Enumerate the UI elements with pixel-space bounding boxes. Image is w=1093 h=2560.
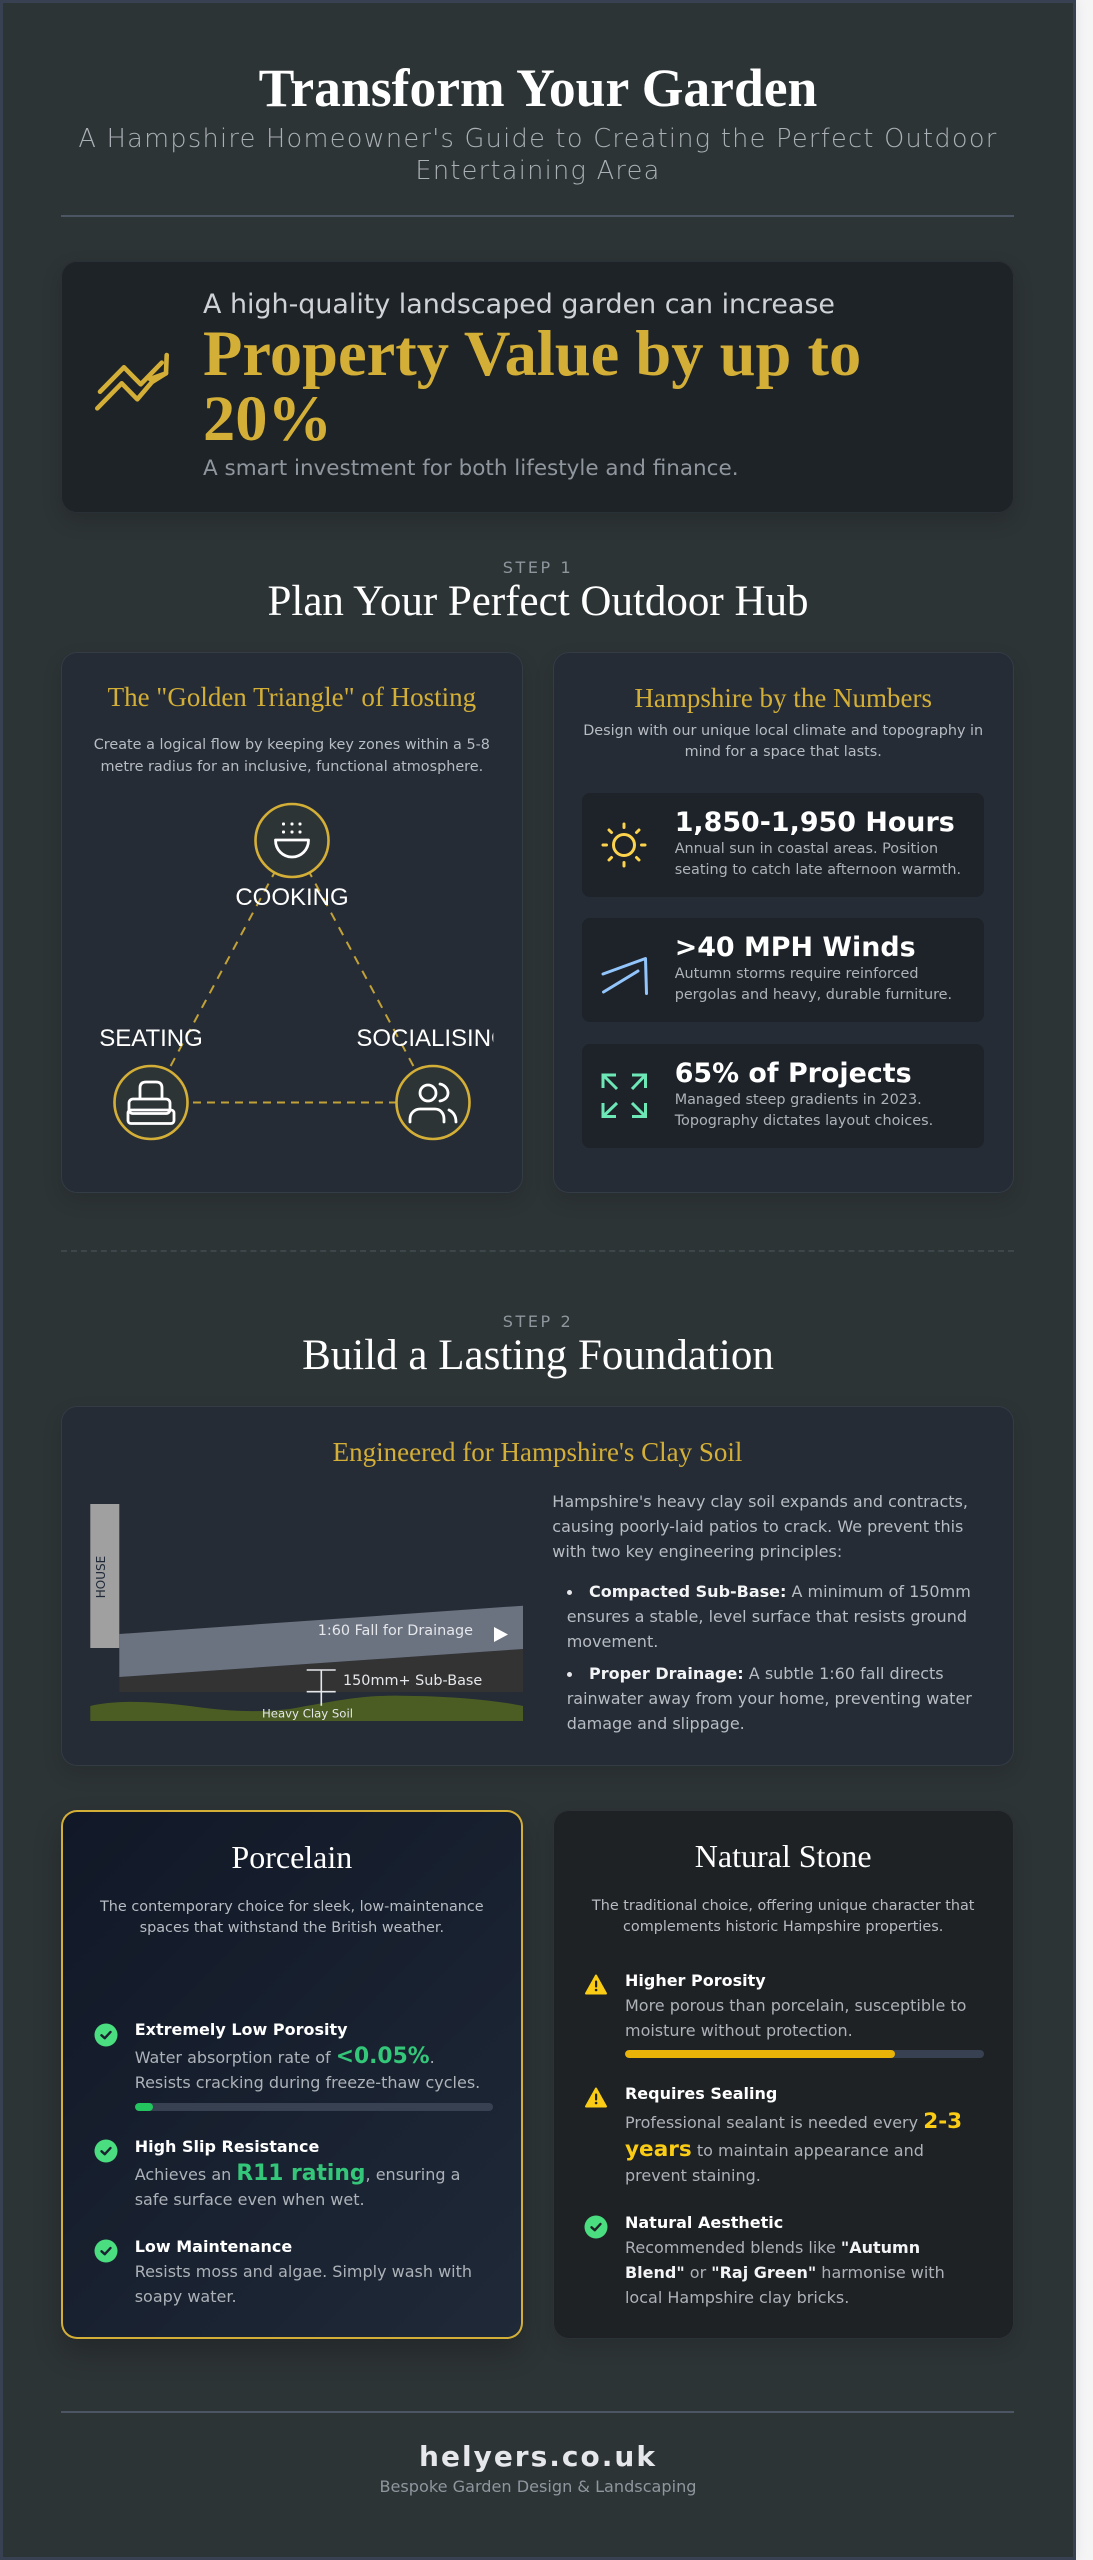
subtitle	[78, 124, 998, 186]
section title: Build a Lasting Foundation	[302, 1332, 774, 1378]
bullet: sub-base: ensures a stable, level surface that resists ground	[567, 1607, 967, 1626]
bullet: drainage	[567, 1664, 972, 1733]
description	[583, 723, 983, 760]
patio cross-section diagram	[90, 1504, 523, 1721]
feature text	[625, 2238, 945, 2307]
node: seating: SEATING	[99, 1025, 203, 1052]
stat text: Autumn storms require reinforced	[675, 966, 919, 982]
title: Transform Your Garden	[259, 58, 817, 118]
feature text	[135, 2262, 472, 2306]
bar: porosity	[625, 2050, 984, 2058]
description: The traditional choice, offering unique character that	[592, 1898, 974, 1914]
feature: low porosity	[94, 2020, 493, 2111]
icon: check	[94, 2240, 118, 2262]
heading: Engineered for Hampshire's Clay Soil	[333, 1437, 742, 1467]
heading: Hampshire by the Numbers	[634, 683, 932, 713]
bullet: sub-base: Compacted Sub-Base: A minimum of 150mm	[589, 1582, 971, 1601]
bullet: drainage: rainwater away from your home, preventing water	[567, 1689, 972, 1708]
icon: trending up	[95, 352, 169, 411]
heading: The "Golden Triangle" of Hosting	[108, 682, 476, 712]
stat text	[674, 966, 952, 1003]
description	[94, 737, 490, 775]
node: cooking: COOKING	[235, 884, 349, 911]
section title: Plan Your Perfect Outdoor Hub	[267, 578, 809, 625]
feature text: Blend" or "Raj Green" harmonise with	[625, 2263, 945, 2282]
house: HOUSE	[94, 1556, 108, 1598]
node: cooking	[235, 804, 349, 911]
bullet: sub-base	[567, 1582, 971, 1651]
feature title: High Slip Resistance	[135, 2137, 319, 2156]
description	[592, 1898, 974, 1935]
panel: golden triangle	[61, 652, 523, 1193]
feature title: Extremely Low Porosity	[135, 2020, 348, 2039]
stat: sun hours	[582, 793, 984, 897]
stat text: seating to catch late afternoon warmth.	[675, 862, 961, 878]
sub-base layer	[119, 1649, 523, 1692]
bar: absorption	[135, 2103, 493, 2111]
subtitle: A Hampshire Homeowner's Guide to Creating the Perfect Outdoor	[78, 124, 998, 154]
feature text: local Hampshire clay bricks.	[625, 2288, 849, 2307]
description: The contemporary choice for sleek, low-maintenance	[100, 1899, 484, 1915]
step label: STEP 2	[503, 1312, 573, 1331]
label: fall: 1:60 Fall for Drainage	[318, 1623, 473, 1639]
heading: Natural Stone	[695, 1838, 872, 1874]
feature text	[625, 1996, 966, 2040]
heading: Porcelain	[231, 1839, 352, 1875]
feature text: Resists moss and algae. Simply wash with	[135, 2262, 472, 2281]
bullet: drainage: Proper Drainage: A subtle 1:60 fall directs	[589, 1664, 944, 1683]
step 2 heading	[302, 1312, 774, 1378]
step 1 heading	[267, 558, 809, 625]
explanation paragraph: causing poorly-laid patios to crack. We prevent this	[552, 1517, 963, 1536]
icon: warning	[585, 1974, 607, 1994]
panel: property value hero	[61, 261, 1014, 513]
explanation paragraph: Hampshire's heavy clay soil expands and contracts,	[552, 1492, 968, 1511]
triangle diagram	[100, 802, 494, 1140]
feature text: Recommended blends like "Autumn	[625, 2238, 920, 2257]
feature title: Requires Sealing	[625, 2084, 777, 2103]
stat text	[674, 841, 961, 878]
step label: STEP 1	[503, 558, 573, 576]
label: soil: Heavy Clay Soil	[262, 1707, 353, 1721]
feature text: prevent staining.	[625, 2166, 761, 2185]
hero headline: 20%	[203, 383, 332, 454]
icon: check	[94, 2140, 118, 2162]
bullet: sub-base: movement.	[567, 1632, 658, 1651]
label: sub-base: 150mm+ Sub-Base	[343, 1673, 482, 1689]
stat text: Annual sun in coastal areas. Position	[675, 841, 938, 857]
hero intro: A high-quality landscaped garden can increase	[203, 289, 835, 320]
arrow: drainage direction	[494, 1627, 508, 1642]
stat: winds	[582, 918, 984, 1022]
hero headline	[203, 318, 861, 454]
feature title: Low Maintenance	[135, 2237, 292, 2256]
header	[78, 58, 998, 186]
description: Design with our unique local climate and topography in	[583, 723, 983, 739]
measure: sub-base depth	[307, 1670, 336, 1706]
explanation paragraph: with two key engineering principles:	[552, 1542, 842, 1561]
panel: porcelain	[61, 1810, 523, 2339]
stat: projects	[582, 1044, 984, 1148]
feature text: moisture without protection.	[625, 2021, 853, 2040]
feature title: Higher Porosity	[625, 1971, 766, 1990]
node: seating	[99, 1025, 203, 1139]
house	[90, 1504, 119, 1648]
feature text: safe surface even when wet.	[135, 2190, 365, 2209]
stat value: 1,850-1,950 Hours	[675, 807, 955, 838]
icon: sun	[602, 822, 646, 868]
footer	[379, 2440, 697, 2496]
stat text: pergolas and heavy, durable furniture.	[675, 987, 952, 1003]
subtitle: Entertaining Area	[415, 156, 661, 186]
stat text: Topography dictates layout choices.	[675, 1113, 933, 1129]
feature: natural aesthetic	[584, 2213, 945, 2307]
description: Create a logical flow by keeping key zones within a 5-8	[94, 737, 490, 753]
panel: hampshire by the numbers	[553, 652, 1014, 1193]
panel: natural stone	[553, 1810, 1014, 2339]
stat text: Managed steep gradients in 2023.	[675, 1092, 922, 1108]
feature text: Resists cracking during freeze-thaw cycles.	[135, 2073, 480, 2092]
stat text	[674, 1092, 933, 1129]
feature: slip resistance	[94, 2137, 460, 2209]
icon: wind	[602, 957, 648, 995]
brand: helyers.co.uk	[419, 2440, 657, 2473]
panel: clay soil engineering	[61, 1406, 1014, 1766]
feature: low maintenance	[94, 2237, 472, 2306]
hero note: A smart investment for both lifestyle and finance.	[203, 456, 739, 481]
feature: higher porosity	[585, 1971, 984, 2058]
description: mind for a space that lasts.	[685, 744, 882, 760]
feature title: Natural Aesthetic	[625, 2213, 783, 2232]
bullet: drainage: damage and slippage.	[567, 1714, 745, 1733]
stat value: 65% of Projects	[675, 1058, 912, 1089]
feature text: More porous than porcelain, susceptible to	[625, 1996, 966, 2015]
icon: expand arrows	[602, 1074, 647, 1118]
icon: check	[584, 2216, 608, 2238]
feature: requires sealing	[585, 2084, 962, 2185]
icon: check	[94, 2024, 118, 2046]
description	[100, 1899, 484, 1936]
tagline: Bespoke Garden Design & Landscaping	[379, 2477, 697, 2496]
feature text: soapy water.	[135, 2287, 237, 2306]
stat value: >40 MPH Winds	[675, 932, 916, 963]
icon: warning	[585, 2088, 607, 2108]
node: socialising	[358, 1029, 494, 1140]
description: spaces that withstand the British weather.	[140, 1920, 444, 1936]
explanation paragraph	[552, 1492, 968, 1561]
feature text: years to maintain appearance and	[625, 2137, 924, 2162]
feature text: Water absorption rate of <0.05%.	[135, 2044, 435, 2069]
patio layer	[119, 1606, 523, 1677]
description: metre radius for an inclusive, functional atmosphere.	[100, 759, 483, 775]
hero headline: Property Value by up to	[203, 318, 861, 389]
feature text: Professional sealant is needed every 2-3	[625, 2109, 962, 2134]
clay soil	[90, 1696, 523, 1721]
feature text: Achieves an R11 rating, ensuring a	[135, 2161, 460, 2186]
node: socialising: SOCIALISING	[356, 1025, 510, 1052]
description: complements historic Hampshire properties.	[623, 1919, 943, 1935]
